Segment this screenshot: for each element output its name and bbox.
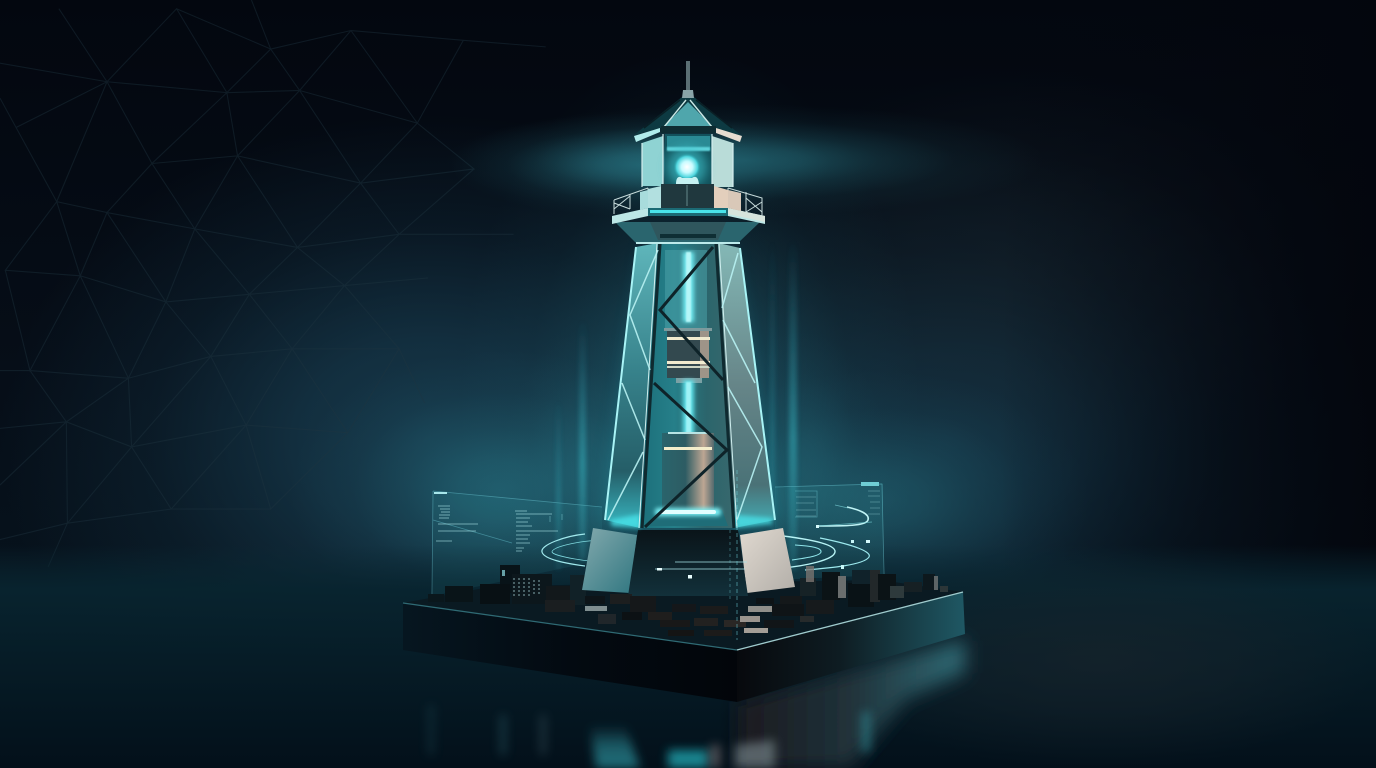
gallery railing: [614, 188, 762, 216]
lantern room: [642, 134, 733, 208]
pedestal: dark centre: [628, 530, 748, 600]
glass panel: left: [605, 243, 658, 528]
pedestal: right block: [740, 528, 795, 593]
spire: [682, 61, 694, 98]
gallery deck: [612, 208, 765, 224]
holographic orbit rings: [542, 534, 869, 570]
glass panel: front: [642, 243, 734, 528]
miniature city blocks (front): [545, 470, 834, 640]
holographic panel: left code screen: [432, 491, 602, 596]
holographic panel: right chart screen: [775, 482, 884, 580]
vertical light shafts: [556, 240, 797, 570]
lighthouse tower: [582, 61, 795, 600]
platform reflection on floor: [428, 640, 965, 768]
glowing floor inside side panels: [610, 514, 640, 528]
triangular mesh pattern: [0, 0, 546, 567]
internal light core: [648, 250, 728, 526]
tower frame: [605, 243, 775, 528]
platform front-left face: [403, 603, 737, 702]
platform front-right face: [737, 592, 965, 702]
platform top surface: [403, 580, 963, 650]
light beams from lantern: [445, 104, 1045, 217]
glass panel: right: [718, 243, 775, 528]
miniature city blocks (back): [428, 565, 948, 612]
tower glow: [605, 245, 775, 525]
square platform base: [403, 580, 965, 702]
neck under the deck: [615, 222, 760, 243]
pedestal: left block: [582, 528, 637, 593]
roof: [634, 97, 742, 142]
floor: [0, 545, 1376, 768]
